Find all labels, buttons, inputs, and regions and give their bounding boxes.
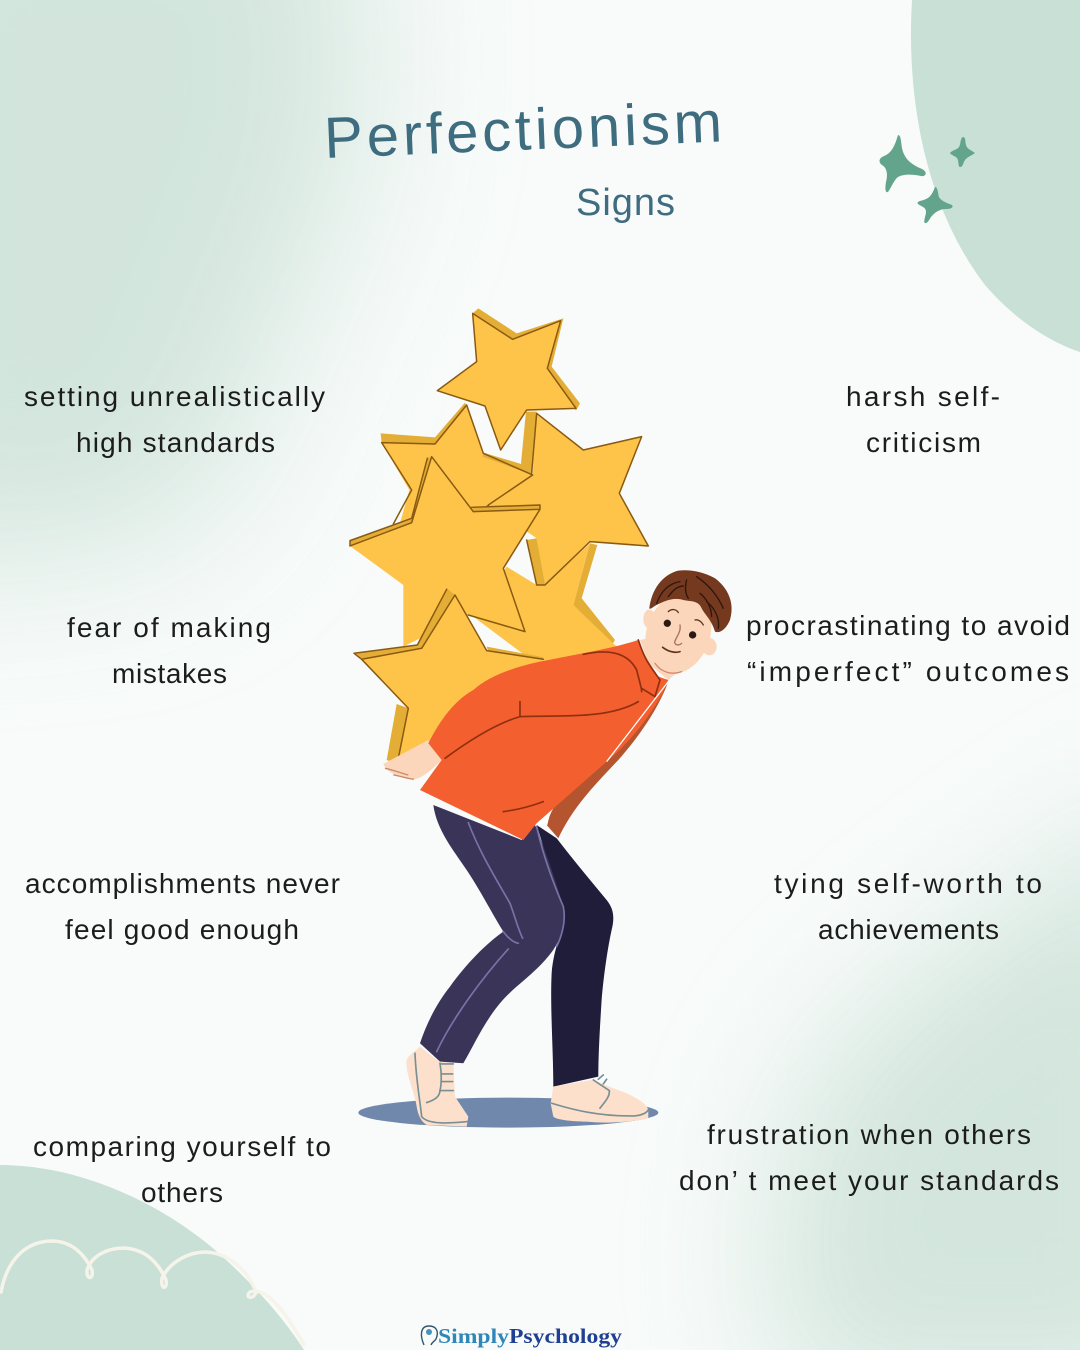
- star: back lower: [473, 543, 617, 667]
- title: Perfectionism: [323, 89, 723, 171]
- left text: fear of making mistakes: fear of making: [67, 612, 271, 643]
- face details: [655, 610, 703, 673]
- background: top-left soft gradient: [0, 0, 361, 570]
- star: front large: [350, 457, 541, 647]
- figure: undershirt: [533, 793, 557, 825]
- figure: shirt: [420, 640, 668, 840]
- right text: frustration when others don't meet your standards: [679, 1119, 1059, 1196]
- blob: bottom-left corner: [0, 1165, 304, 1350]
- left text: comparing yourself to others: [33, 1131, 331, 1208]
- star: top: [437, 308, 580, 450]
- figure: back leg: [537, 825, 613, 1087]
- left text: comparing yourself to others: comparing yourself to: [33, 1131, 331, 1162]
- left text: setting unrealistically high standards: high standards: [76, 427, 275, 458]
- logo wordmark: Simply Psychology: [438, 1324, 623, 1348]
- left text: setting unrealistically high standards: setting unrealistically: [24, 381, 325, 412]
- right text: procrastinating to avoid imperfect outcomes: procrastinating to avoid: [746, 610, 1070, 641]
- figure: hand: [383, 740, 442, 779]
- left text: accomplishments never feel good enough: [25, 868, 340, 945]
- figure: front leg: [420, 805, 565, 1063]
- figure: hair: [649, 570, 732, 632]
- star: back left: [381, 403, 533, 533]
- figure: back shoe: [551, 1075, 648, 1123]
- sparkle: medium lower: [918, 187, 953, 223]
- left text: fear of making mistakes: [67, 612, 271, 689]
- logo icon: head: [421, 1326, 437, 1345]
- sparkle: small right: [950, 137, 975, 167]
- right text: tying self-worth to achievements: achievements: [818, 914, 999, 945]
- blob: top-right corner: [911, 0, 1080, 352]
- figure: front shoe: [406, 1047, 468, 1127]
- ear right: [702, 638, 717, 655]
- left text: accomplishments never feel good enough: accomplishments never: [25, 868, 340, 899]
- subtitle: Signs: [576, 182, 675, 224]
- right text: tying self-worth to achievements: [774, 868, 1042, 945]
- star: back right: [488, 412, 648, 585]
- right text: procrastinating to avoid imperfect outcomes: [746, 610, 1070, 687]
- right text: procrastinating to avoid imperfect outcomes: “imperfect” outcomes: [747, 656, 1069, 687]
- logo: Simply Psychology: [421, 1324, 623, 1348]
- right text: harsh self-criticism: harsh self-: [846, 381, 1000, 412]
- decorative loop line: [1, 1241, 304, 1345]
- star: front lower: [353, 588, 553, 764]
- right text: harsh self-criticism: criticism: [866, 427, 981, 458]
- left text: setting unrealistically high standards: [24, 381, 325, 458]
- right text: frustration when others don't meet your standards: frustration when others: [707, 1119, 1031, 1150]
- left text: fear of making mistakes: mistakes: [112, 658, 227, 689]
- figure: neck and face: [634, 583, 722, 683]
- figure: shirt inner back: [547, 682, 668, 838]
- sparkle: large: [880, 135, 926, 192]
- right text: frustration when others don't meet your standards: don’ t meet your standards: [679, 1165, 1059, 1196]
- background: bottom-right soft gradient: [771, 790, 1080, 1350]
- ear left: [643, 610, 655, 628]
- left text: accomplishments never feel good enough: feel good enough: [65, 914, 299, 945]
- illustration: man carrying stars: [350, 308, 732, 1128]
- ground shadow: [358, 1098, 658, 1128]
- right text: tying self-worth to achievements: tying self-worth to: [774, 868, 1042, 899]
- right text: harsh self-criticism: [846, 381, 1000, 458]
- left text: comparing yourself to others: others: [141, 1177, 223, 1208]
- icon: sparkles: [880, 135, 975, 223]
